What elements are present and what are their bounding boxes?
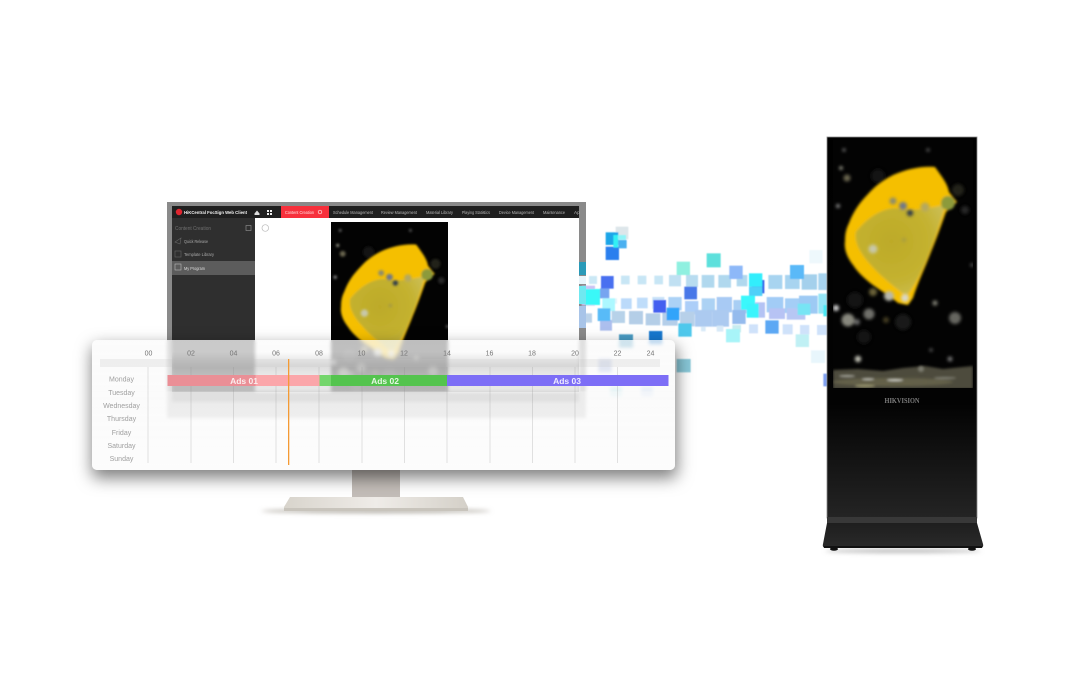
data stream of pixels [580,227,827,397]
monitor stand [261,470,491,513]
middle band pixels [580,286,827,331]
top navigation bar: Maintenance [543,210,565,215]
top navigation bar: Schedule Management [333,210,374,215]
weekday labels: Thursday [107,416,137,423]
left edge pixels by monitor [579,262,586,328]
hour labels: 16 [486,350,493,358]
schedule panel [92,340,675,470]
hour labels: 12 [400,350,408,358]
digital signage display [823,137,983,553]
back button [262,225,269,231]
bar: Ads 03 [447,375,668,386]
hour labels: 02 [187,350,195,358]
background scene [166,136,984,556]
hour labels: 20 [571,350,579,358]
hour labels: 24 [647,350,654,358]
top navigation bar: Device Management [499,210,535,215]
hour labels: 04 [230,350,237,358]
top navigation bar: Material Library [426,210,454,215]
top navigation bar [172,206,580,218]
upper pixel cluster [606,227,628,260]
bar: Ads 01: Ads 01 [230,376,258,386]
weekday labels: Saturday [107,443,136,450]
display base [823,517,983,551]
hour labels: 18 [528,350,536,358]
top navigation bar: Ap [574,210,580,215]
current time marker [288,359,289,465]
bar: Ads 02: Ads 02 [371,376,399,386]
bar: Ads 02 [320,375,447,386]
sidebar menu: Template Library [184,252,215,257]
software content area [255,218,579,392]
weekday labels: Tuesday [108,390,135,397]
display screen image [833,140,974,389]
hour labels: 00 [145,350,152,358]
bar: Ads 01 [168,375,320,386]
panel shading over monitor [172,352,579,392]
hour labels: 10 [358,350,365,358]
grid lines [148,367,618,463]
upper row pixels [589,250,827,299]
hour labels: 06 [272,350,280,358]
top navigation bar: Playing Statistics [462,210,491,215]
brand label: HIKVISION [884,396,920,405]
sidebar menu: Content Creation [175,226,211,232]
hour labels: 22 [614,350,621,358]
weekday labels: Friday [112,430,132,437]
weekday labels: Sunday [110,456,134,463]
top navigation bar: Content Creation [285,210,314,215]
hour labels [145,350,654,358]
top navigation bar: Review Management [381,210,418,215]
sidebar menu [172,218,255,402]
weekday labels: Wednesday [103,403,140,410]
monitor with software screen [167,202,586,430]
weekday labels: Monday [109,376,134,384]
program preview image [330,222,450,393]
timeline header band [100,359,660,367]
bar: Ads 03: Ads 03 [553,376,581,386]
weekday labels [103,376,140,463]
display body [827,137,977,518]
sidebar menu: My Program [184,266,205,271]
top navigation bar: HiKCentral FocSign Web Client [184,210,247,215]
hour labels: 14 [443,350,451,358]
hour labels: 08 [315,350,323,358]
sidebar menu: Quick Release [184,239,208,244]
lower row pixels [598,320,827,397]
